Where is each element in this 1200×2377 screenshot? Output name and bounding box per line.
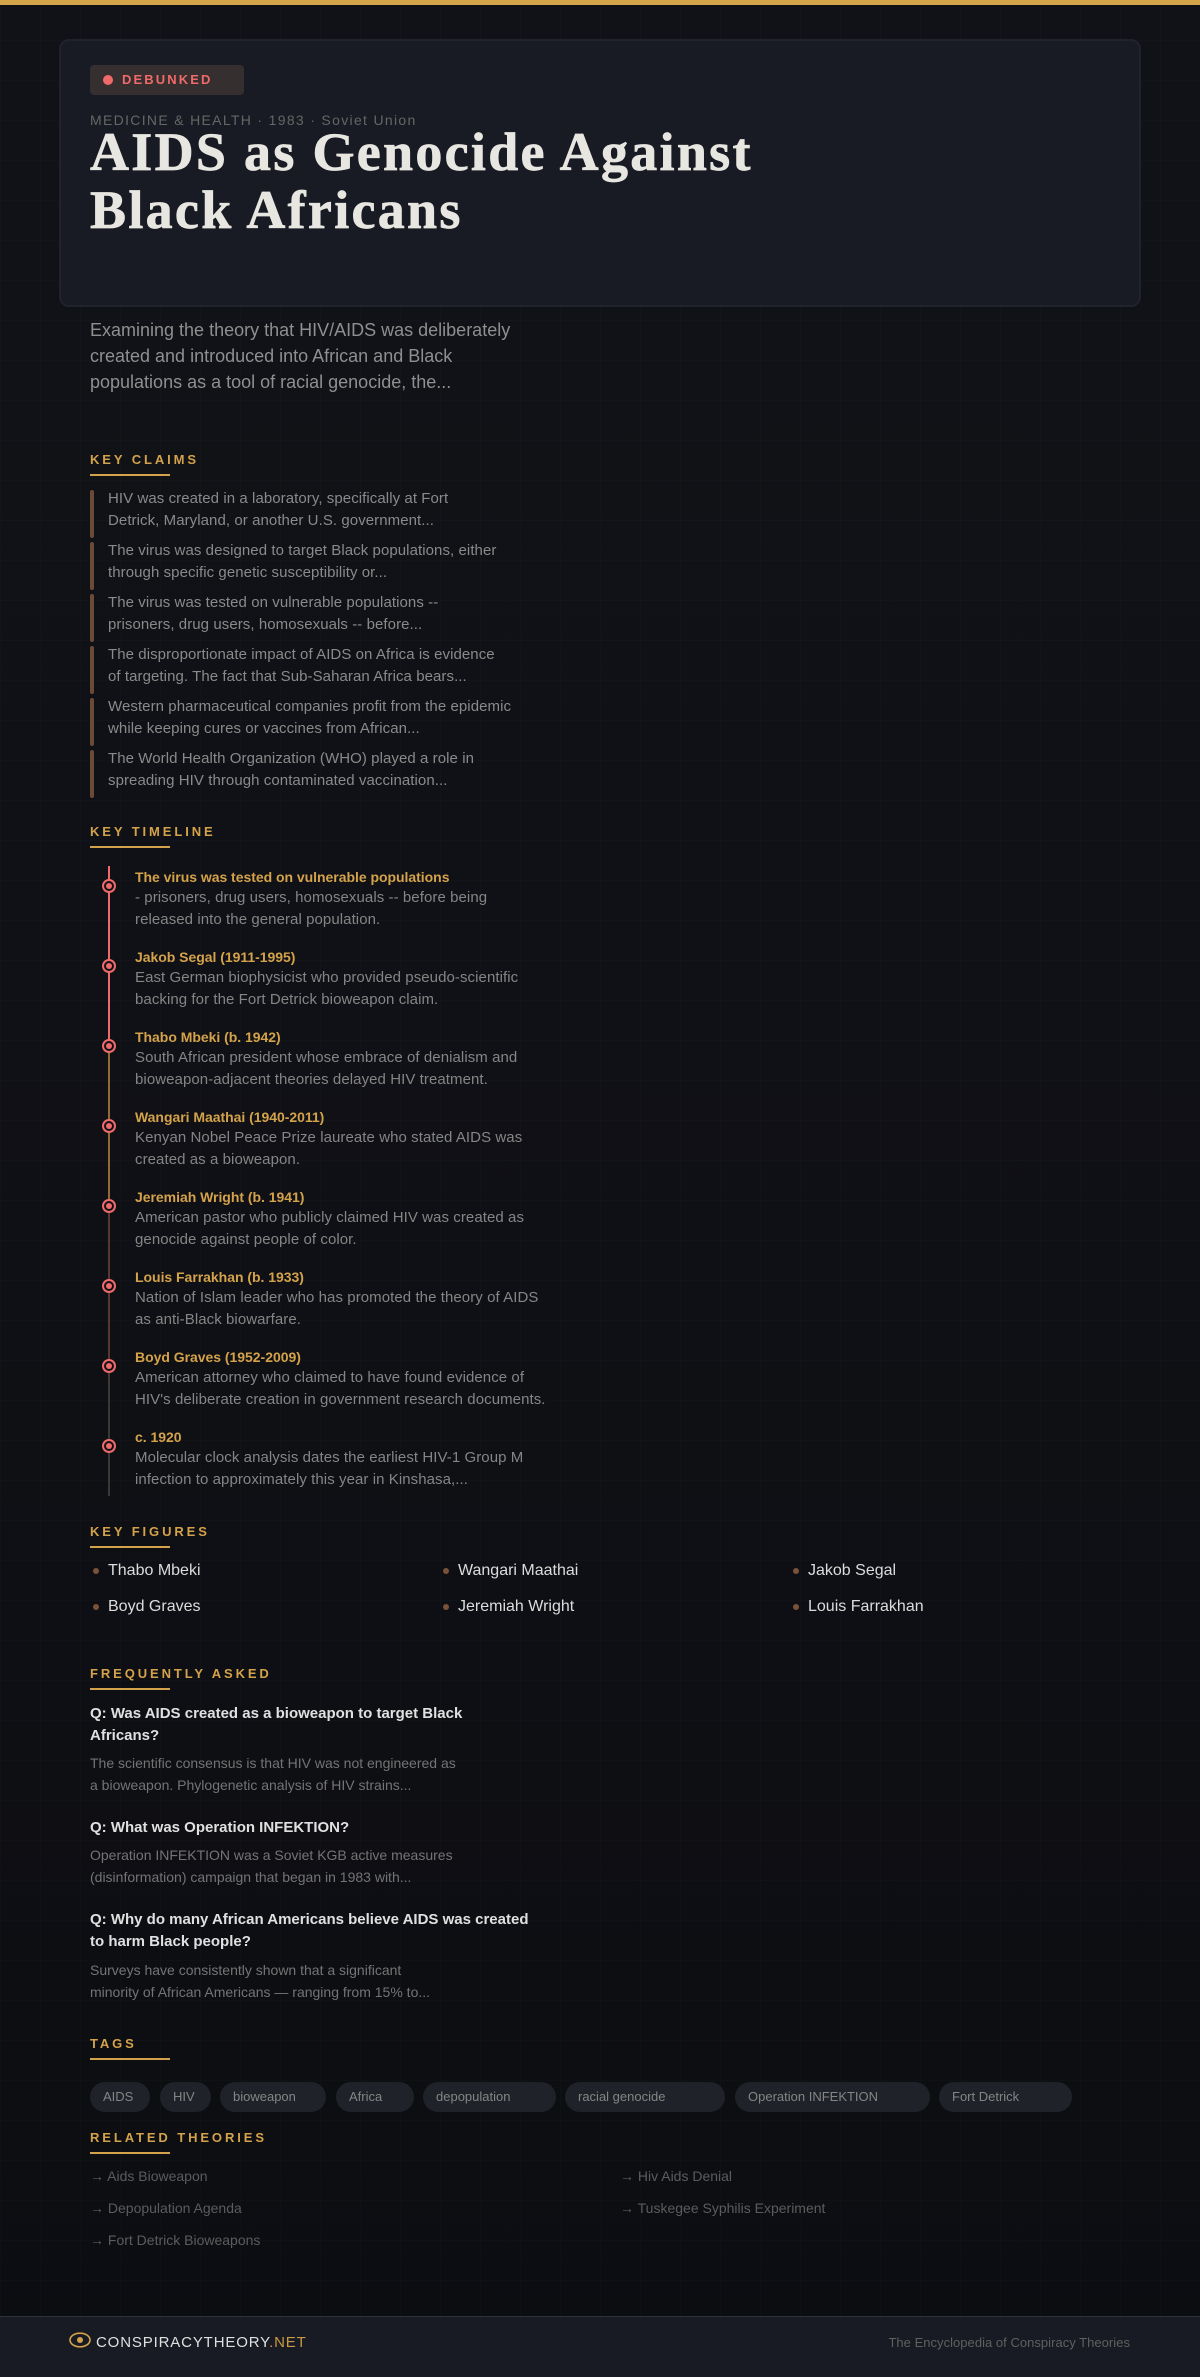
- answer 1: a bioweapon. Phylogenetic analysis of HIV strains...: [90, 1777, 411, 1793]
- question 2: Q: What was Operation INFEKTION?: [90, 1819, 349, 1836]
- event 1: released into the general population.: [135, 911, 380, 928]
- claim 1: [90, 490, 448, 538]
- tag list: [90, 2082, 1072, 2112]
- event 2: backing for the Fort Detrick bioweapon claim.: [135, 991, 438, 1008]
- related link 2: → Hiv Aids Denial: [620, 2168, 732, 2184]
- event 8: infection to approximately this year in Kinshasa,...: [135, 1471, 468, 1488]
- panel: key figures: [90, 1524, 924, 1615]
- claim 2: [90, 542, 496, 590]
- tag list: AIDS: [103, 2089, 133, 2104]
- answer 2: Operation INFEKTION was a Soviet KGB active measures: [90, 1847, 453, 1863]
- event 4: created as a bioweapon.: [135, 1151, 300, 1168]
- answer 3: minority of African Americans — ranging from 15% to...: [90, 1984, 430, 2000]
- figure: Thabo Mbeki: Thabo Mbeki: [108, 1562, 200, 1579]
- claim 1: HIV was created in a laboratory, specifically at Fort: [108, 490, 448, 507]
- event 1: - prisoners, drug users, homosexuals -- before being: [135, 889, 487, 906]
- event 4: [135, 1109, 522, 1168]
- panel: tags: [90, 2036, 1072, 2112]
- event 8: Molecular clock analysis dates the earliest HIV-1 Group M: [135, 1449, 523, 1466]
- event 8: [135, 1429, 523, 1488]
- tag list: Fort Detrick: [952, 2089, 1019, 2104]
- event 6: Louis Farrakhan (b. 1933): [135, 1269, 304, 1285]
- claim 4: of targeting. The fact that Sub-Saharan Africa bears...: [108, 668, 467, 685]
- intro text: populations as a tool of racial genocide, the...: [90, 372, 451, 392]
- icon: status dot: [103, 75, 113, 85]
- answer 3: [90, 1962, 430, 2000]
- event 7: [135, 1349, 546, 1408]
- intro text: created and introduced into African and Black: [90, 346, 452, 366]
- title: Black Africans: [90, 180, 463, 240]
- claim 3: [90, 594, 438, 642]
- tag list: depopulation: [436, 2089, 510, 2104]
- claim 5: Western pharmaceutical companies profit from the epidemic: [108, 698, 511, 715]
- intro text: [90, 320, 510, 392]
- claim 5: while keeping cures or vaccines from African...: [108, 720, 420, 737]
- claim 4: The disproportionate impact of AIDS on Africa is evidence: [108, 646, 495, 663]
- question 3: to harm Black people?: [90, 1933, 251, 1950]
- panel: key claims: [90, 452, 511, 798]
- figure: Louis Farrakhan: Louis Farrakhan: [808, 1598, 924, 1615]
- footer: [0, 2316, 1200, 2377]
- badge label: DEBUNKED: [122, 72, 212, 87]
- timeline markers: [102, 879, 116, 1453]
- panel: key timeline: [90, 824, 546, 1496]
- question 1: [90, 1705, 462, 1744]
- panel: header: [59, 39, 1141, 307]
- event 7: American attorney who claimed to have found evidence of: [135, 1369, 524, 1386]
- event 5: [135, 1189, 524, 1248]
- panel: related theories: [90, 2130, 826, 2248]
- claim 6: spreading HIV through contaminated vaccination...: [108, 772, 447, 789]
- event 3: [135, 1029, 517, 1088]
- title: AIDS as Genocide Against: [90, 122, 753, 182]
- badge: debunked: [90, 65, 244, 95]
- event 3: Thabo Mbeki (b. 1942): [135, 1029, 281, 1045]
- event 5: American pastor who publicly claimed HIV was created as: [135, 1209, 524, 1226]
- heading: key timeline: KEY TIMELINE: [90, 824, 216, 839]
- meta line: MEDICINE & HEALTH · 1983 · Soviet Union: [90, 112, 417, 128]
- event 7: Boyd Graves (1952-2009): [135, 1349, 301, 1365]
- event 6: Nation of Islam leader who has promoted the theory of AIDS: [135, 1289, 538, 1306]
- event 7: HIV's deliberate creation in government research documents.: [135, 1391, 546, 1408]
- event 5: genocide against people of color.: [135, 1231, 357, 1248]
- related link 4: → Tuskegee Syphilis Experiment: [620, 2200, 825, 2216]
- heading: key claims: KEY CLAIMS: [90, 452, 199, 467]
- event 6: as anti-Black biowarfare.: [135, 1311, 301, 1328]
- related link 1: → Aids Bioweapon: [90, 2168, 208, 2184]
- event 2: [135, 949, 518, 1008]
- figure: Jeremiah Wright: Jeremiah Wright: [458, 1598, 574, 1615]
- event 1: The virus was tested on vulnerable populations: [135, 869, 449, 885]
- question 1: Q: Was AIDS created as a bioweapon to target Black: [90, 1705, 462, 1722]
- event 4: Kenyan Nobel Peace Prize laureate who stated AIDS was: [135, 1129, 522, 1146]
- heading: key figures: KEY FIGURES: [90, 1524, 210, 1539]
- claim 5: [90, 698, 511, 746]
- answer 1: [90, 1755, 456, 1793]
- event 2: Jakob Segal (1911-1995): [135, 949, 295, 965]
- icon: eye logo: [69, 2332, 91, 2348]
- tag list: racial genocide: [578, 2089, 665, 2104]
- event 5: Jeremiah Wright (b. 1941): [135, 1189, 304, 1205]
- claim 4: [90, 646, 495, 694]
- top accent bar: [0, 0, 1200, 5]
- answer 3: Surveys have consistently shown that a significant: [90, 1962, 401, 1978]
- event 8: c. 1920: [135, 1429, 182, 1445]
- timeline line: [108, 866, 110, 1496]
- logo wordmark: CONSPIRACYTHEORY.NET: [96, 2334, 307, 2351]
- claim 2: The virus was designed to target Black populations, either: [108, 542, 496, 559]
- event 2: East German biophysicist who provided pseudo-scientific: [135, 969, 518, 986]
- answer 2: [90, 1847, 453, 1885]
- claim 1: Detrick, Maryland, or another U.S. government...: [108, 512, 434, 529]
- related link 3: → Depopulation Agenda: [90, 2200, 242, 2216]
- tag list: Africa: [349, 2089, 382, 2104]
- claim 6: [90, 750, 474, 798]
- title: [90, 122, 753, 240]
- panel: frequently asked: [90, 1666, 528, 2000]
- tag list: bioweapon: [233, 2089, 296, 2104]
- claim 6: The World Health Organization (WHO) played a role in: [108, 750, 474, 767]
- heading: related theories: RELATED THEORIES: [90, 2130, 267, 2145]
- heading: tags: TAGS: [90, 2036, 137, 2051]
- event 1: [135, 869, 487, 928]
- figure: Boyd Graves: Boyd Graves: [108, 1598, 200, 1615]
- event 4: Wangari Maathai (1940-2011): [135, 1109, 324, 1125]
- question 3: Q: Why do many African Americans believe AIDS was created: [90, 1911, 528, 1928]
- figure: Wangari Maathai: Wangari Maathai: [458, 1562, 578, 1579]
- claim 3: The virus was tested on vulnerable populations --: [108, 594, 438, 611]
- claim 3: prisoners, drug users, homosexuals -- before...: [108, 616, 422, 633]
- answer 1: The scientific consensus is that HIV was not engineered as: [90, 1755, 456, 1771]
- question 3: [90, 1911, 528, 1950]
- heading: frequently asked: FREQUENTLY ASKED: [90, 1666, 272, 1681]
- figure: Jakob Segal: Jakob Segal: [808, 1562, 896, 1579]
- tag list: Operation INFEKTION: [748, 2089, 878, 2104]
- event 3: bioweapon-adjacent theories delayed HIV treatment.: [135, 1071, 488, 1088]
- event 3: South African president whose embrace of denialism and: [135, 1049, 517, 1066]
- event 6: [135, 1269, 538, 1328]
- answer 2: (disinformation) campaign that began in 1983 with...: [90, 1869, 411, 1885]
- intro text: Examining the theory that HIV/AIDS was deliberately: [90, 320, 510, 340]
- claim 2: through specific genetic susceptibility or...: [108, 564, 387, 581]
- related link 5: → Fort Detrick Bioweapons: [90, 2232, 260, 2248]
- tagline: The Encyclopedia of Conspiracy Theories: [888, 2335, 1130, 2350]
- tag list: HIV: [173, 2089, 195, 2104]
- question 1: Africans?: [90, 1727, 159, 1744]
